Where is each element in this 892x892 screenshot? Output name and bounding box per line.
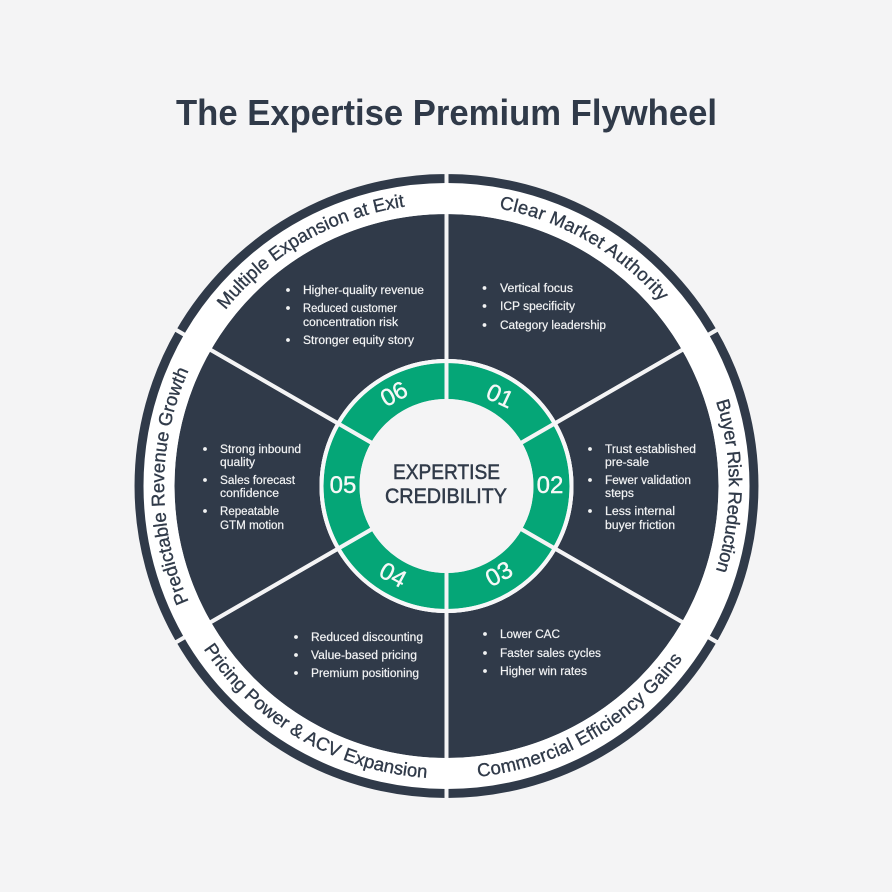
- panel: 06 multiple expansion: concentration risk: [303, 317, 398, 329]
- segment 06: 06: [376, 376, 412, 413]
- segment 01: [446, 361, 555, 444]
- curved label: predictable revenue growth: Predictable Revenue Growth: [152, 368, 188, 606]
- panel: 03 commercial efficiency gains: Faster sales cycles: [500, 648, 601, 660]
- panel: 05 predictable revenue growth: confidence: [220, 488, 279, 500]
- curved label: clear market authority: Clear Market Authority: [500, 196, 668, 300]
- panel: 02 buyer risk reduction: Fewer validation: [605, 475, 691, 487]
- panel: 02 buyer risk reduction: pre-sale: [605, 457, 649, 469]
- panel: 02 buyer risk reduction: Less internal: [605, 506, 675, 518]
- panel: 03 commercial efficiency gains: Higher win rates: [500, 666, 587, 678]
- panel: 02 buyer risk reduction: [555, 349, 721, 623]
- panel: 04 pricing power: Reduced discounting: [311, 632, 423, 644]
- segment 06: [338, 361, 446, 444]
- panel: 01 clear market authority: [446, 212, 684, 424]
- segment 05: [322, 424, 373, 548]
- center hub: [360, 399, 534, 573]
- panel: 06 multiple expansion: [209, 212, 446, 424]
- segment 03: [446, 528, 555, 611]
- segment 02: [520, 424, 571, 548]
- thin white ring around green: [322, 361, 572, 611]
- panel: 06 multiple expansion: Reduced customer: [303, 303, 397, 315]
- panel: 03 commercial efficiency gains: [446, 548, 684, 760]
- panel: 05 predictable revenue growth: Strong inbound: [220, 444, 301, 456]
- center hub: CREDIBILITY: [385, 485, 507, 508]
- panel: 05 predictable revenue growth: [172, 349, 338, 623]
- curved label: buyer risk reduction: Buyer Risk Reduction: [716, 399, 742, 572]
- panel: 04 pricing power: [209, 548, 446, 760]
- segment 03: 03: [481, 556, 517, 593]
- panel: 05 predictable revenue growth: quality: [220, 457, 255, 469]
- panel: 03 commercial efficiency gains: Lower CAC: [500, 629, 560, 641]
- panel: 05 predictable revenue growth: Sales forecast: [220, 475, 296, 487]
- green numbered ring: [322, 361, 571, 611]
- panel: 05 predictable revenue growth: GTM motion: [220, 520, 284, 532]
- segment 02: 02: [537, 472, 563, 499]
- panel: 04 pricing power: Premium positioning: [311, 668, 419, 680]
- curved label: pricing power and acv expansion: Pricing Power & ACV Expansion: [204, 642, 426, 778]
- title: The Expertise Premium Flywheel: [176, 92, 717, 133]
- panel: 02 buyer risk reduction: Trust established: [605, 444, 696, 456]
- segment 05: 05: [330, 472, 356, 499]
- panel: 01 clear market authority: Vertical focus: [500, 283, 573, 295]
- curved label: commercial efficiency gains: Commercial Efficiency Gains: [478, 654, 682, 776]
- panel: 02 buyer risk reduction: steps: [605, 488, 634, 500]
- panel: 06 multiple expansion: Higher-quality revenue: [303, 285, 424, 297]
- panel: 04 pricing power: Value-based pricing: [311, 650, 417, 662]
- segment 01: 01: [482, 379, 518, 414]
- white label ring: [159, 198, 734, 774]
- panel: 05 predictable revenue growth: Repeatable: [220, 506, 279, 518]
- panel: 06 multiple expansion: Stronger equity story: [303, 335, 414, 347]
- center hub: EXPERTISE: [393, 461, 500, 484]
- panel: 01 clear market authority: ICP specificity: [500, 301, 575, 313]
- outer ring segments: [133, 172, 760, 800]
- curved label: multiple expansion at exit: Multiple Expansion at Exit: [216, 194, 405, 310]
- panel: 02 buyer risk reduction: buyer friction: [605, 520, 675, 532]
- segment 04: 04: [375, 557, 411, 594]
- segment 04: [338, 528, 446, 611]
- panel: 01 clear market authority: Category leadership: [500, 320, 606, 332]
